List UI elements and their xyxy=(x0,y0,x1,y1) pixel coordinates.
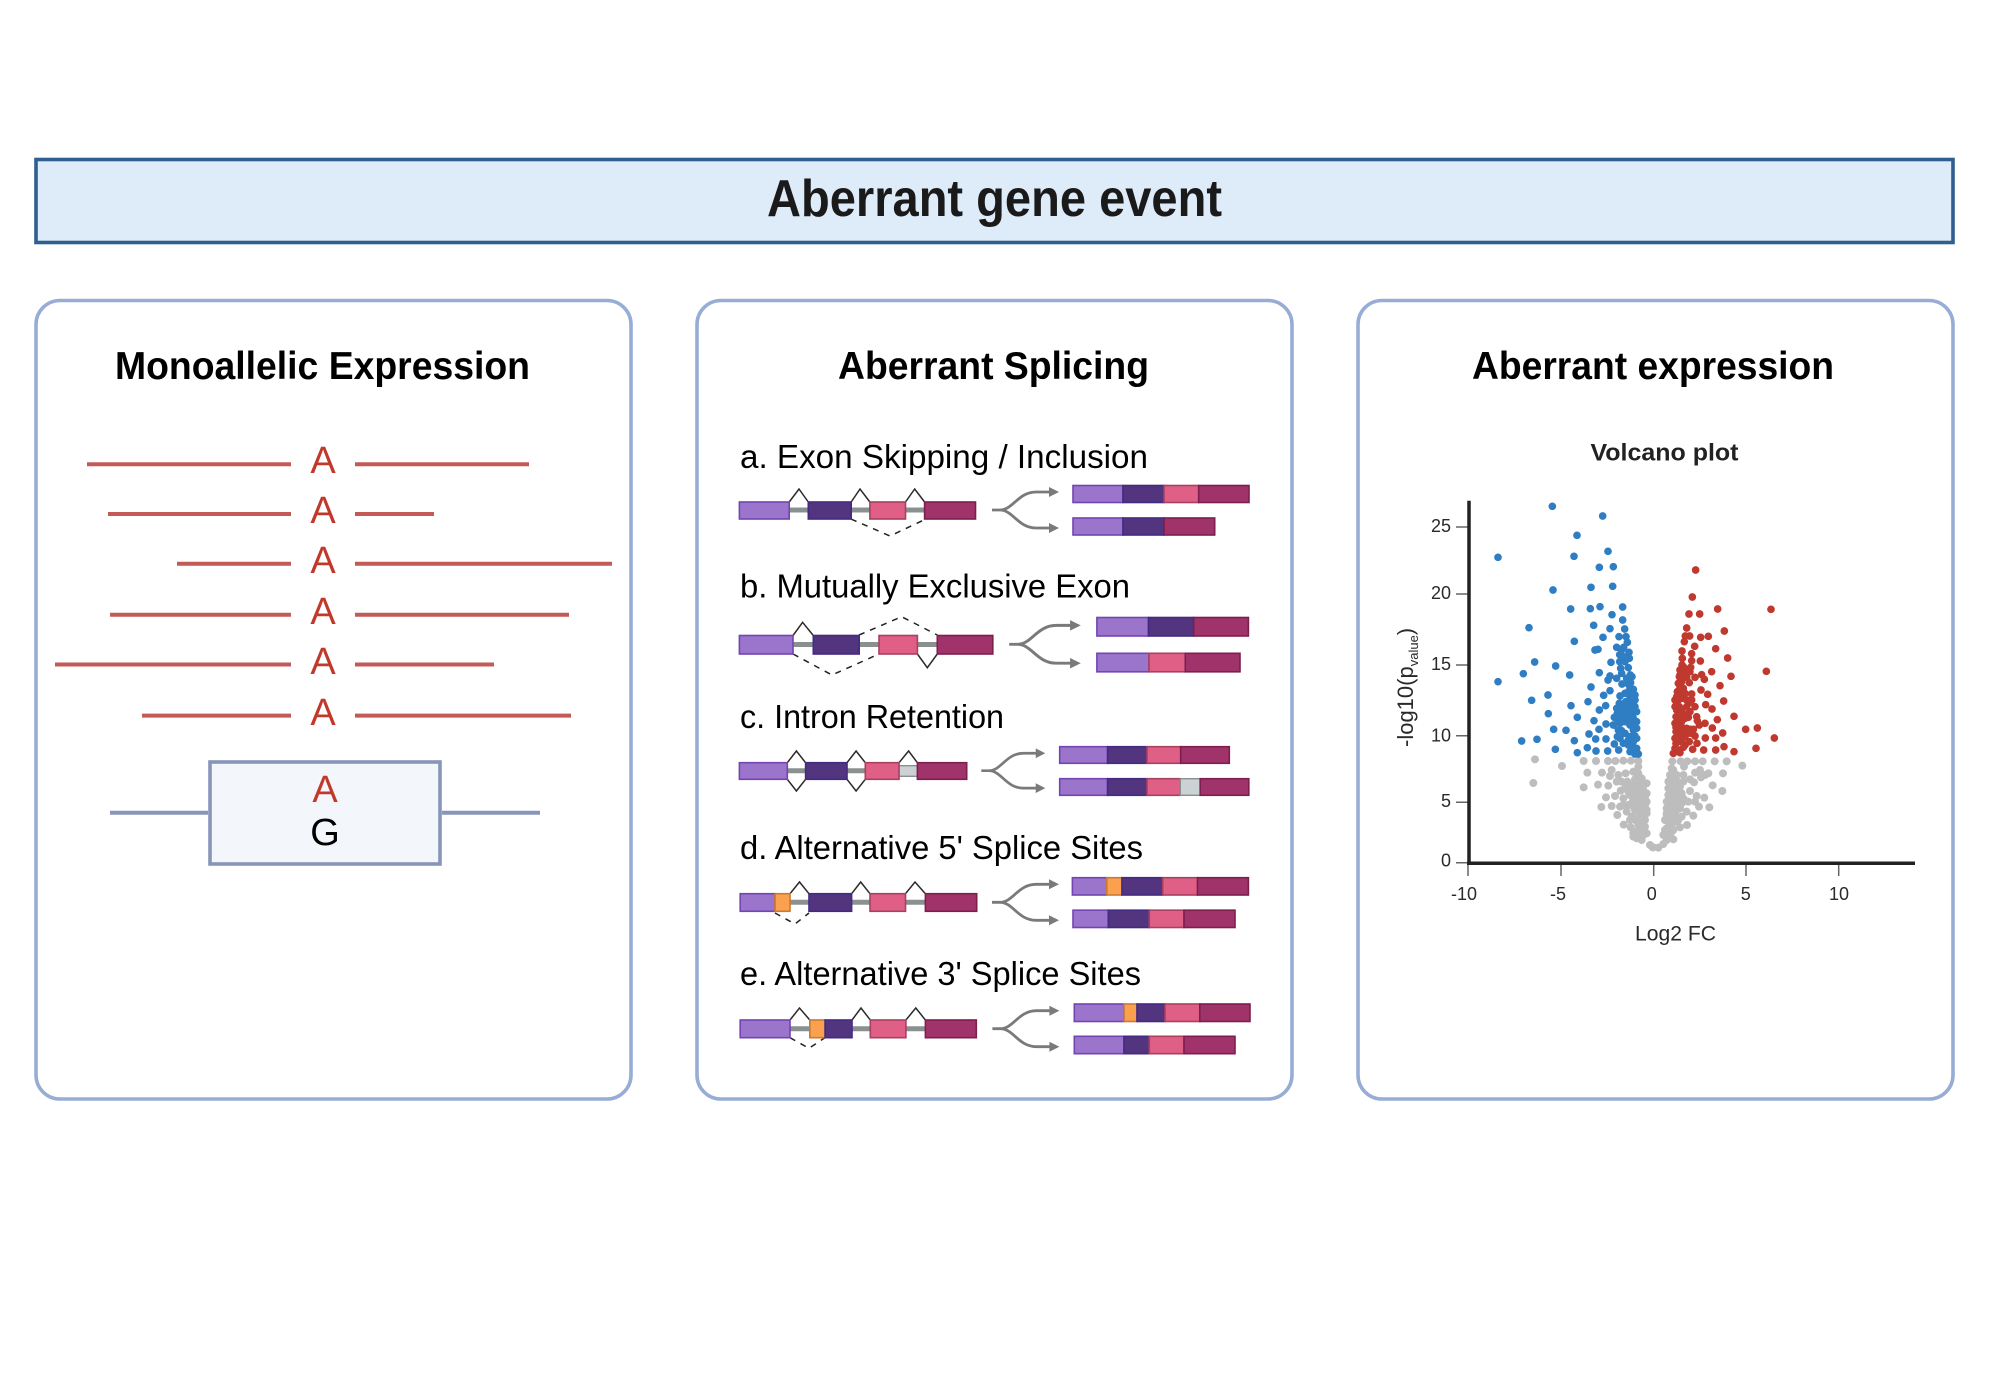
panel: aberrant expression xyxy=(1358,300,1953,1099)
heterozygous locus box xyxy=(110,762,540,864)
y axis label: ) xyxy=(1393,628,1418,635)
x axis tick labels: 0 xyxy=(1647,884,1657,904)
y axis tick labels: 0 xyxy=(1441,851,1451,871)
read lines with A allele: A xyxy=(310,692,336,734)
panel: monoallelic expression xyxy=(36,300,631,1099)
down-regulated points xyxy=(1498,506,1638,754)
heterozygous locus box: A xyxy=(312,769,338,811)
heading: aberrant expression: Aberrant expression xyxy=(1472,345,1834,388)
read lines with A allele: A xyxy=(310,641,336,683)
y axis label: value xyxy=(1406,635,1421,666)
x axis tick labels: -5 xyxy=(1550,884,1566,904)
label d: d. Alternative 5' Splice Sites xyxy=(740,829,1143,866)
diagram c: intron retention xyxy=(739,747,1249,795)
x axis tick labels: 5 xyxy=(1741,884,1751,904)
x axis tick labels xyxy=(1451,884,1849,904)
label e: e. Alternative 3' Splice Sites xyxy=(740,955,1141,992)
label a: a. Exon Skipping / Inclusion xyxy=(740,438,1148,475)
read lines with A allele: A xyxy=(310,591,336,633)
read lines with A allele xyxy=(55,440,612,734)
y axis tick labels xyxy=(1431,516,1451,871)
title: Aberrant gene event xyxy=(767,170,1222,228)
non-significant points xyxy=(1533,759,1742,848)
x axis tick labels: 10 xyxy=(1829,884,1849,904)
read lines with A allele: A xyxy=(310,540,336,582)
label b: b. Mutually Exclusive Exon xyxy=(740,568,1130,605)
diagram a: exon skipping xyxy=(739,486,1249,536)
title banner xyxy=(36,160,1953,242)
axes and ticks xyxy=(1456,501,1915,876)
heading: aberrant splicing: Aberrant Splicing xyxy=(838,345,1149,388)
read lines with A allele: A xyxy=(310,440,336,482)
volcano plot chart xyxy=(1393,501,1915,946)
y axis label: -log10(p xyxy=(1393,666,1418,747)
volcano plot title: Volcano plot xyxy=(1590,440,1739,466)
y axis tick labels: 15 xyxy=(1431,654,1451,674)
y axis tick labels: 5 xyxy=(1441,791,1451,811)
y axis tick labels: 10 xyxy=(1431,726,1451,746)
panel: aberrant splicing xyxy=(697,300,1292,1099)
y axis tick labels: 20 xyxy=(1431,583,1451,603)
up-regulated points xyxy=(1673,570,1774,753)
heterozygous locus box: G xyxy=(310,812,340,854)
diagram b: mutually exclusive exon xyxy=(739,617,1248,675)
heading: monoallelic expression: Monoallelic Expression xyxy=(115,345,530,388)
diagram e: alternative 3 prime splice sites xyxy=(740,1004,1250,1054)
read lines with A allele: A xyxy=(310,490,336,532)
y axis tick labels: 25 xyxy=(1431,516,1451,536)
diagram d: alternative 5 prime splice sites xyxy=(740,878,1248,928)
label c: c. Intron Retention xyxy=(740,698,1004,735)
x axis tick labels: -10 xyxy=(1451,884,1477,904)
x axis label: Log2 FC xyxy=(1635,923,1716,946)
